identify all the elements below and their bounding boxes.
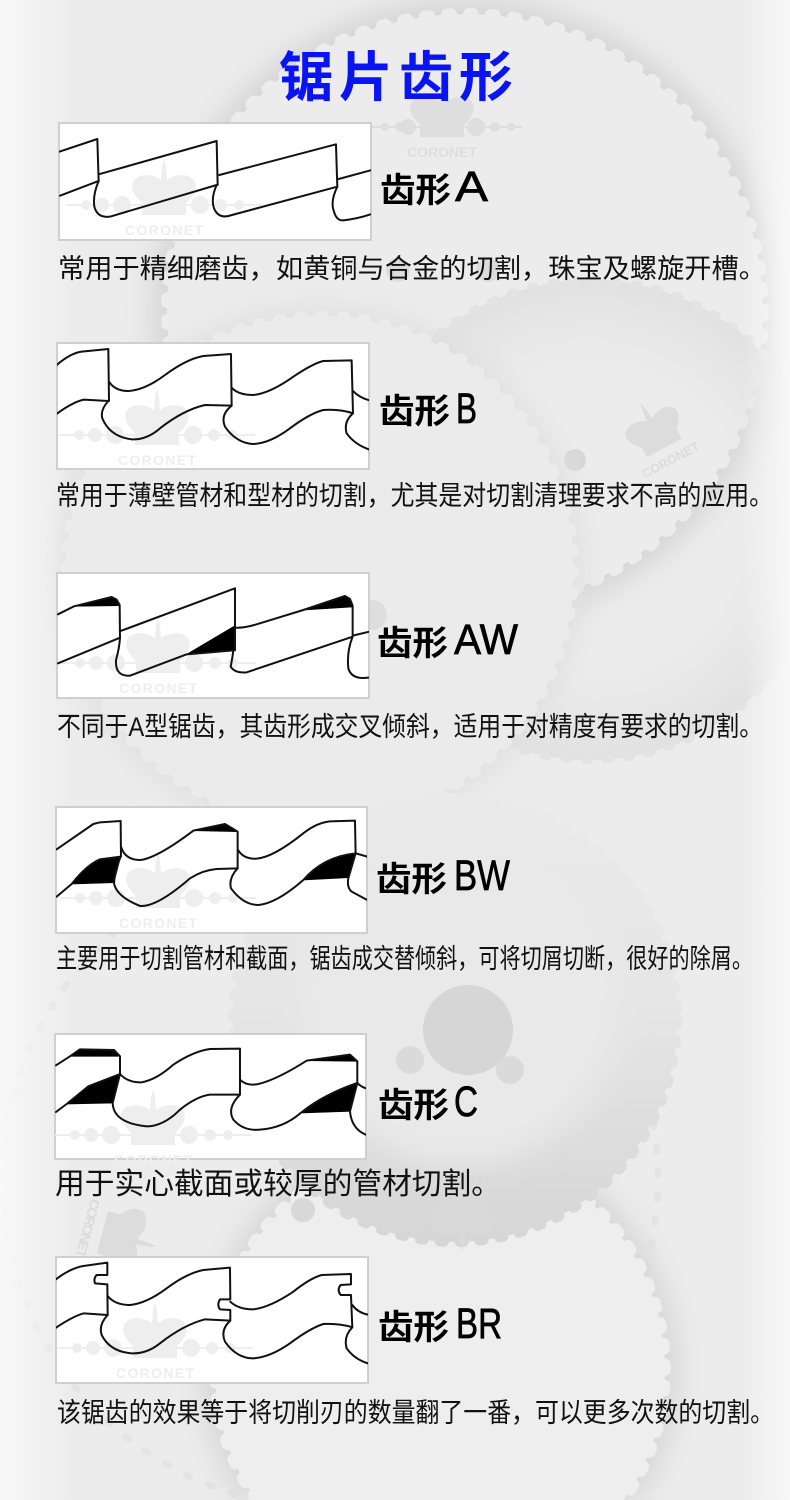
label: 齿形B bbox=[379, 384, 477, 433]
watermark: coronet AW: CORONET bbox=[119, 680, 197, 696]
label: 齿形A: A bbox=[455, 163, 488, 211]
saw teeth profile C bbox=[56, 1049, 367, 1135]
label: 齿形BR: BR bbox=[456, 1300, 502, 1348]
watermark: coronet C: CORONET bbox=[114, 1152, 192, 1168]
background watermark: upside down: CORONET bbox=[434, 1172, 490, 1188]
label: 齿形BW: 齿形 bbox=[376, 852, 447, 901]
label: 齿形B: B bbox=[456, 385, 477, 433]
watermark: coronet B bbox=[59, 389, 255, 468]
label: 齿形BR: 齿形 bbox=[378, 1300, 449, 1349]
description C: 用于实心截面或较厚的管材切割。 bbox=[55, 1168, 501, 1201]
background watermark: top bbox=[362, 81, 522, 160]
watermark: coronet BW: CORONET bbox=[119, 915, 197, 931]
saw teeth profile BR bbox=[55, 1263, 370, 1364]
section: tooth form AW bbox=[57, 573, 763, 742]
background watermark: top: CORONET bbox=[407, 144, 477, 160]
background watermark: left rotated: CORONET bbox=[72, 1197, 103, 1260]
label: 齿形A: 齿形 bbox=[380, 163, 451, 212]
saw blade: top bbox=[153, 0, 777, 624]
saw teeth profile BW bbox=[57, 821, 367, 906]
saw teeth profile A bbox=[59, 139, 371, 220]
watermark: coronet B: CORONET bbox=[118, 452, 196, 468]
background watermark: upside down bbox=[402, 1172, 522, 1251]
background watermark: rotated right: CORONET bbox=[640, 439, 702, 481]
label: 齿形AW: 齿形 bbox=[377, 616, 448, 665]
saw teeth profile B bbox=[56, 349, 371, 450]
label: 齿形A bbox=[380, 163, 488, 212]
panel: tooth B diagram bbox=[56, 343, 371, 469]
label: 齿形AW: AW bbox=[454, 616, 518, 664]
saw blade: bottom light bbox=[202, 1131, 678, 1500]
label: 齿形C bbox=[378, 1078, 478, 1127]
panel: tooth BW diagram bbox=[56, 807, 367, 933]
watermark: coronet BR: CORONET bbox=[116, 1365, 194, 1381]
panel: tooth AW diagram bbox=[57, 573, 369, 698]
watermark: coronet A bbox=[66, 159, 262, 238]
saw teeth profile AW bbox=[58, 588, 369, 678]
label: 齿形BW: BW bbox=[454, 852, 510, 900]
section: tooth form BR bbox=[55, 1257, 774, 1428]
section: tooth form B bbox=[56, 343, 773, 511]
section: tooth form A bbox=[58, 123, 766, 284]
label: 齿形BR bbox=[378, 1300, 502, 1349]
saw blade: upper right bbox=[350, 280, 790, 760]
panel: tooth A diagram bbox=[59, 123, 371, 240]
description A: 常用于精细磨齿，如黄铜与合金的切割，珠宝及螺旋开槽。 bbox=[58, 254, 766, 284]
background watermark: left rotated bbox=[72, 1196, 165, 1278]
label: 齿形AW bbox=[377, 616, 518, 665]
panel: tooth BR diagram bbox=[55, 1257, 370, 1383]
background watermark: rotated right bbox=[613, 389, 702, 481]
label: 齿形B: 齿形 bbox=[379, 384, 450, 433]
label: 齿形C: C bbox=[454, 1078, 478, 1126]
section: tooth form BW bbox=[56, 807, 753, 974]
watermark: coronet A: CORONET bbox=[125, 222, 203, 238]
label: 齿形BW bbox=[376, 852, 510, 901]
saw blade: lower outer teeth bbox=[2, 852, 658, 1500]
watermark: coronet BR bbox=[57, 1302, 253, 1381]
saw blade: lower middle bbox=[233, 798, 677, 1242]
watermark: coronet BW bbox=[60, 852, 256, 931]
watermark: coronet AW bbox=[60, 617, 256, 696]
label: 齿形C: 齿形 bbox=[378, 1078, 449, 1127]
watermark: coronet C bbox=[55, 1089, 251, 1168]
section: tooth form C bbox=[55, 1034, 501, 1201]
title: 锯片齿形 bbox=[279, 48, 513, 108]
saw blade: left middle bbox=[58, 308, 582, 832]
panel: tooth C diagram bbox=[55, 1034, 367, 1168]
